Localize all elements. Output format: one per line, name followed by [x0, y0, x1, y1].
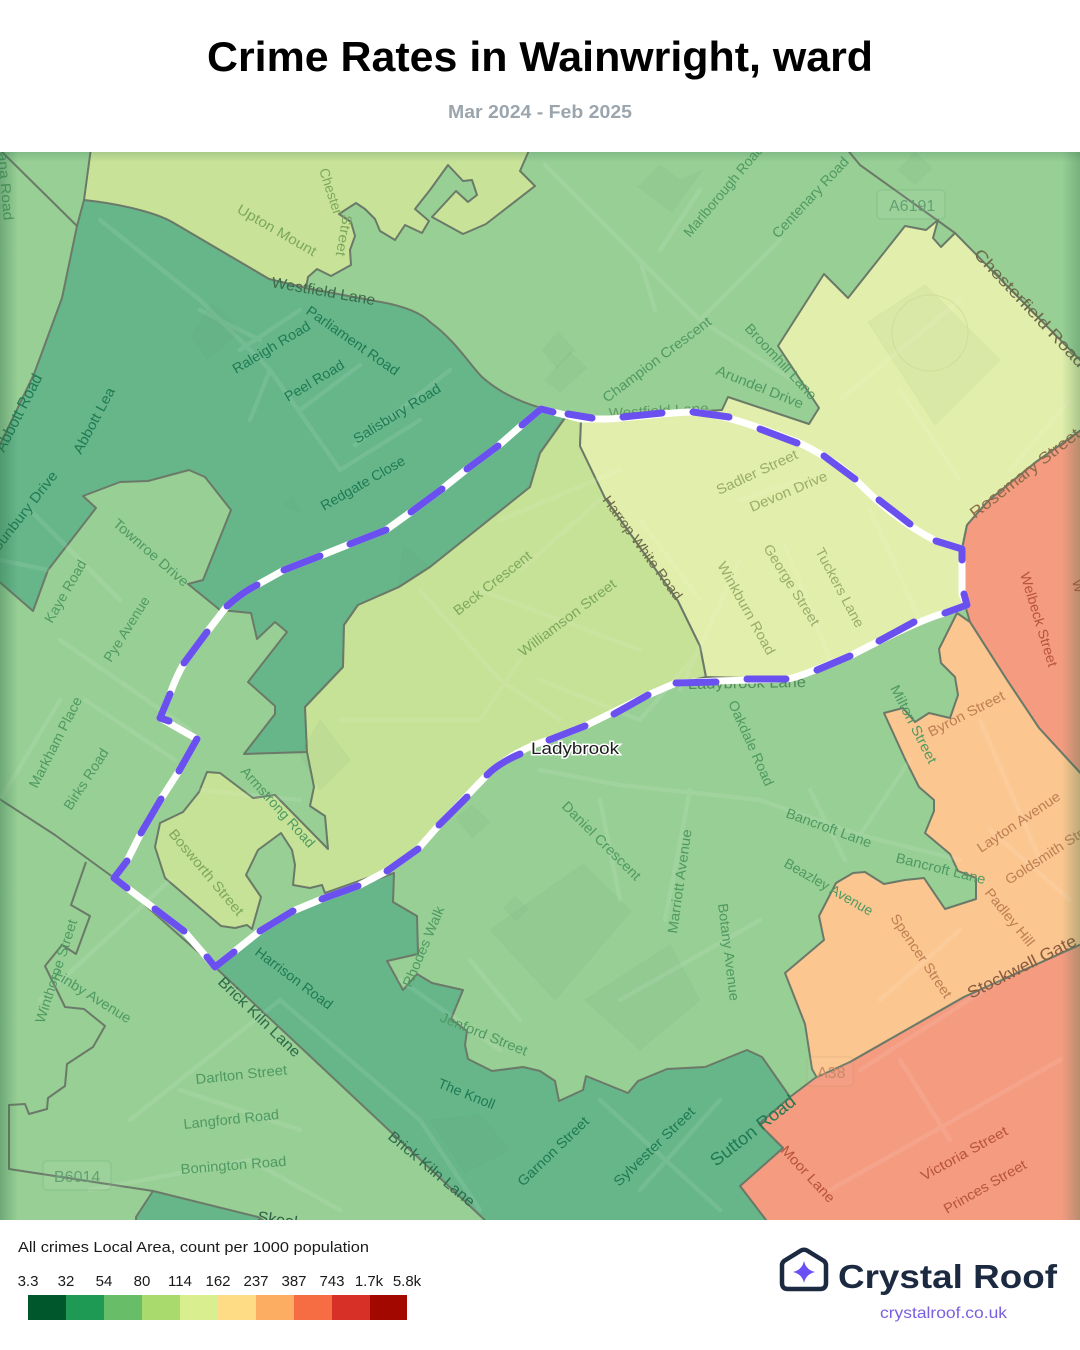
- major road labels crossing zones: Stockwell Gate: [964, 931, 1080, 1003]
- legend colour scale: [28, 1295, 407, 1320]
- subtitle: date range: Mar 2024 - Feb 2025: [448, 102, 632, 122]
- labels on base green: Pye Avenue: [100, 593, 153, 665]
- title: Crime Rates in Wainwright, ward: [207, 33, 873, 80]
- labels on dark green: Redgate Close: [318, 452, 408, 514]
- labels on base green: Centenary Road: [768, 153, 852, 241]
- wordmark: Crystal Roof: [838, 1258, 1058, 1295]
- legend values: 5.8k: [393, 1273, 422, 1290]
- labels on base green: Marlborough Road: [680, 142, 766, 240]
- major road labels crossing zones: Harrop White Road: [600, 492, 686, 603]
- major road labels crossing zones: Westfield Lane: [608, 400, 709, 421]
- labels on base green: Daniel Crescent: [559, 798, 645, 883]
- parks and building patches: [308, 173, 1000, 1048]
- labels on yellow green: [166, 166, 619, 919]
- legend: [18, 1239, 422, 1320]
- legend values: 237: [243, 1273, 269, 1290]
- labels on base green: Birks Road: [60, 745, 112, 813]
- labels on dark green: Garnon Street: [514, 1113, 592, 1189]
- labels on yellow green: Chester: [316, 166, 346, 217]
- labels on red: Welbeck Street: [1017, 570, 1061, 669]
- labels on dark green: Brick Kiln Lane: [214, 974, 304, 1061]
- road network: [0, 165, 1070, 1210]
- labels on dark green: Parliament Road: [303, 302, 403, 379]
- legend values: 114: [168, 1273, 192, 1290]
- map edge shading: [0, 152, 1080, 1220]
- labels on base green: Champion Crescent: [599, 313, 714, 405]
- labels on dark green: Brick Kiln Lane: [384, 1128, 478, 1210]
- labels on base green: Arundel Drive: [714, 362, 806, 412]
- major road labels crossing zones: [270, 246, 1080, 1003]
- labels on base green: Broomhill Lane: [742, 320, 820, 403]
- ward boundary: [114, 409, 967, 967]
- labels on base green: Langford Road: [183, 1106, 280, 1132]
- labels on base green: Kaye Road: [41, 557, 90, 626]
- labels on base green: Bonington Road: [180, 1153, 287, 1177]
- legend values: 387: [281, 1273, 307, 1290]
- labels on dark green: Salisbury Road: [350, 380, 443, 447]
- road shield: A38: [807, 1057, 853, 1086]
- legend values: 32: [58, 1273, 74, 1290]
- map base area: [0, 152, 1080, 1220]
- labels on base green: Linby Avenue: [51, 966, 135, 1026]
- labels on base green: Bancroft Lane: [894, 849, 988, 887]
- labels on dark green: The Knoll: [436, 1075, 498, 1112]
- labels on dark green: Skeol: [256, 1209, 298, 1232]
- website url: crystalroof.co.uk: [880, 1305, 1008, 1322]
- labels on base green: Oakdale Road: [725, 698, 777, 788]
- cricket ground outline: [892, 295, 968, 371]
- legend values: 162: [205, 1273, 231, 1290]
- labels on base green: Markham Place: [25, 694, 85, 790]
- major road labels crossing zones: Ladybrook Lane: [688, 674, 806, 693]
- labels on red: Princes Street: [940, 1156, 1029, 1217]
- labels on dark green: Abbott Lea: [70, 384, 118, 456]
- labels on pale yellow: George Street: [760, 541, 823, 629]
- labels on pale yellow: [714, 446, 868, 657]
- labels on base green: Botany Avenue: [715, 902, 743, 1002]
- labels on base green: Beazley Avenue: [782, 855, 876, 919]
- labels on base green: Marriott Avenue: [664, 828, 695, 934]
- labels on orange: Byron Street: [925, 687, 1007, 740]
- icon: house with star: [782, 1250, 826, 1289]
- labels on pale yellow: Devon Drive: [747, 468, 830, 515]
- road shield: A6191: [877, 190, 945, 219]
- legend title: All crimes Local Area, count per 1000 population: [18, 1239, 369, 1256]
- labels on orange: Spencer Street: [888, 911, 956, 1001]
- legend values: 54: [96, 1273, 112, 1290]
- major road labels crossing zones: Chesterfield Road: [970, 246, 1080, 371]
- labels on base green: Milton Street: [887, 682, 941, 766]
- labels on base green: Winthorpe Street: [32, 917, 80, 1025]
- labels on dark green: Sylvester Street: [610, 1103, 698, 1189]
- labels on dark green: Sutton Road: [706, 1091, 800, 1170]
- labels on base green: Darlton Street: [195, 1061, 288, 1087]
- labels on dark green: Raleigh Road: [229, 318, 313, 377]
- logo: Crystal Roof: [782, 1250, 1058, 1322]
- labels on yellow green: Upton Mount: [234, 201, 320, 259]
- labels on red: [778, 570, 1080, 1217]
- place label: Ladybrook: Ladybrook: [531, 739, 620, 758]
- legend values: 80: [134, 1273, 150, 1290]
- major road labels crossing zones: Westfield Lane: [270, 274, 377, 309]
- labels on dark green: Peel Road: [281, 356, 347, 405]
- labels on yellow green: Beck Crescent: [450, 547, 535, 618]
- labels on base green: [0, 142, 988, 1177]
- labels on red: Victoria Street: [918, 1123, 1010, 1184]
- map zones: [0, 148, 1080, 1225]
- labels on base green: Jenford Street: [438, 1009, 530, 1059]
- boundary casing: [114, 409, 967, 967]
- road shield: B6014: B6014: [54, 1169, 100, 1186]
- major road labels crossing zones: Rosemary Street: [967, 425, 1080, 522]
- labels on pale yellow: Sadler Street: [714, 446, 800, 498]
- labels on orange: Padley Hill: [982, 885, 1038, 949]
- labels on yellow green: Street: [333, 213, 356, 258]
- labels on dark green: [0, 302, 800, 1232]
- labels on orange: Layton Avenue: [974, 788, 1063, 855]
- labels on base green: Armstrong Road: [238, 763, 319, 851]
- labels on pale yellow: Winkburn Road: [714, 559, 779, 657]
- labels on pale yellow: Tuckers Lane: [812, 545, 868, 630]
- legend values: 3.3: [18, 1273, 38, 1290]
- labels on base green: Bancroft Lane: [784, 805, 874, 851]
- boundary dashes: [114, 409, 967, 967]
- labels on dark green: Harrison Road: [252, 944, 336, 1012]
- labels on red: Moor Lane: [778, 1142, 839, 1206]
- road shield: B6014: [43, 1161, 111, 1190]
- legend values: [18, 1273, 422, 1290]
- road shield: A6191: A6191: [889, 198, 935, 215]
- road shield: A38: A38: [817, 1065, 846, 1082]
- labels on orange: [888, 687, 1080, 1001]
- labels on base green: Townroe Drive: [110, 515, 192, 590]
- labels on base green: Rhodes Walk: [399, 903, 448, 989]
- labels on yellow green: Bosworth Street: [166, 826, 247, 919]
- legend values: 1.7k: [355, 1273, 384, 1290]
- legend values: 743: [319, 1273, 345, 1290]
- labels on yellow green: Williamson Street: [515, 576, 619, 659]
